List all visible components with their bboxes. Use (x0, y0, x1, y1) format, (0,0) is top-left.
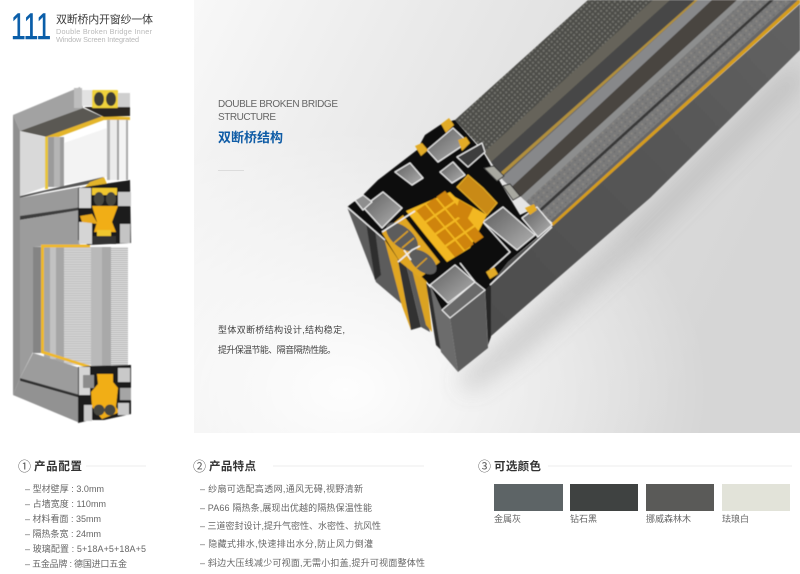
hero heading: STRUCTURE (218, 112, 276, 123)
panel: product specs (18, 459, 146, 569)
heading: colours: 可选颜色 (494, 459, 542, 473)
lower opening (44, 247, 64, 365)
spec list: – 隔热条宽 : 24mm (25, 528, 101, 539)
spec list: – 占墙宽度 : 110mm (25, 498, 106, 509)
left window product view (13, 87, 131, 423)
cast shadow (458, 60, 800, 392)
swatch: norwegian forest wood: 挪威森林木 (646, 513, 691, 524)
swatch: norwegian forest wood (646, 484, 714, 524)
hero heading: 双断桥结构 (218, 130, 283, 145)
spec list: – 材料看面 : 35mm (25, 513, 101, 524)
swatch: metal grey (494, 484, 563, 524)
hero profile: cross-section and extrusion (347, 0, 800, 392)
feature list: – PA66 隔热条,展现出优越的隔热保温性能 (200, 502, 372, 513)
feature list: – 三道密封设计,提升气密性、水密性、抗风性 (200, 520, 381, 531)
frame main column (13, 115, 20, 395)
extrusion bands (454, 0, 800, 223)
amber thermal strip (457, 175, 497, 215)
lower dark strip (490, 4, 800, 337)
gasket ends (484, 166, 504, 181)
polyamide grid (406, 191, 487, 262)
yellow edge line (551, 0, 800, 226)
spec list (25, 483, 146, 569)
spec list: – 五金品牌 : 德国进口五金 (25, 558, 127, 569)
hero description (218, 324, 345, 355)
mesh band (454, 0, 652, 150)
panel: product features (193, 459, 425, 568)
feature list: – 纱扇可选配高透网,通风无碍,视野清新 (200, 483, 363, 494)
insulation chambers (381, 211, 441, 279)
heading: features: 产品特点 (209, 459, 256, 473)
mid rail (20, 187, 80, 217)
bottom rail (20, 353, 80, 397)
heading: colours (478, 459, 792, 474)
spec list: – 型材壁厚 : 3.0mm (25, 483, 104, 494)
header: title: 双断桥内开窗纱一体 (56, 12, 153, 26)
section: middle (78, 180, 131, 245)
hero description: 提升保温节能、隔音隔热性能。 (218, 344, 336, 355)
hero heading: DOUBLE BROKEN BRIDGE (218, 99, 338, 110)
left faces (347, 207, 403, 305)
feature list (200, 483, 425, 568)
heading: features (193, 459, 424, 474)
frame top face (13, 87, 83, 131)
feature list: – 隐藏式排水,快速排出水分,防止风力倒灌 (200, 538, 373, 549)
section edge lines (347, 207, 552, 285)
section: bottom (78, 365, 131, 423)
header: title (56, 12, 153, 44)
spec list: – 玻璃配置 : 5+18A+5+18A+5 (25, 543, 146, 554)
heading: colours: ③ (478, 459, 491, 474)
swatch: metal grey: 金属灰 (494, 513, 521, 524)
hollow tubes (355, 128, 552, 318)
heading: features: ② (193, 459, 206, 474)
panel: hero background (194, 0, 800, 433)
hero description: 型体双断桥结构设计,结构稳定, (218, 324, 345, 335)
upper sill dark line (20, 177, 104, 198)
heading: specs (18, 459, 146, 474)
upper glass (64, 128, 107, 184)
swatch: diamond black: 钻石黑 (570, 513, 597, 524)
heading rule (218, 170, 244, 171)
panel: colour options (478, 459, 792, 524)
section base (347, 120, 552, 318)
header: title: Window Screen Integrated (56, 35, 139, 44)
section: top (74, 88, 130, 117)
swatch: enamel white (722, 484, 790, 524)
feature list: – 斜边大压线减少可视面,无需小扣盖,提升可视面整体性 (200, 557, 425, 568)
heading: specs: 产品配置 (34, 459, 82, 473)
front post (430, 285, 458, 372)
swatch: enamel white: 珐琅白 (722, 513, 749, 524)
hero heading (218, 99, 338, 145)
header: series number: 111 (11, 6, 51, 47)
heading: specs: ① (18, 459, 31, 474)
header: title: Double Broken Bridge Inner (56, 27, 153, 36)
gasket clips (415, 118, 537, 279)
swatch: diamond black (570, 484, 638, 524)
yellow sash line (42, 246, 90, 367)
